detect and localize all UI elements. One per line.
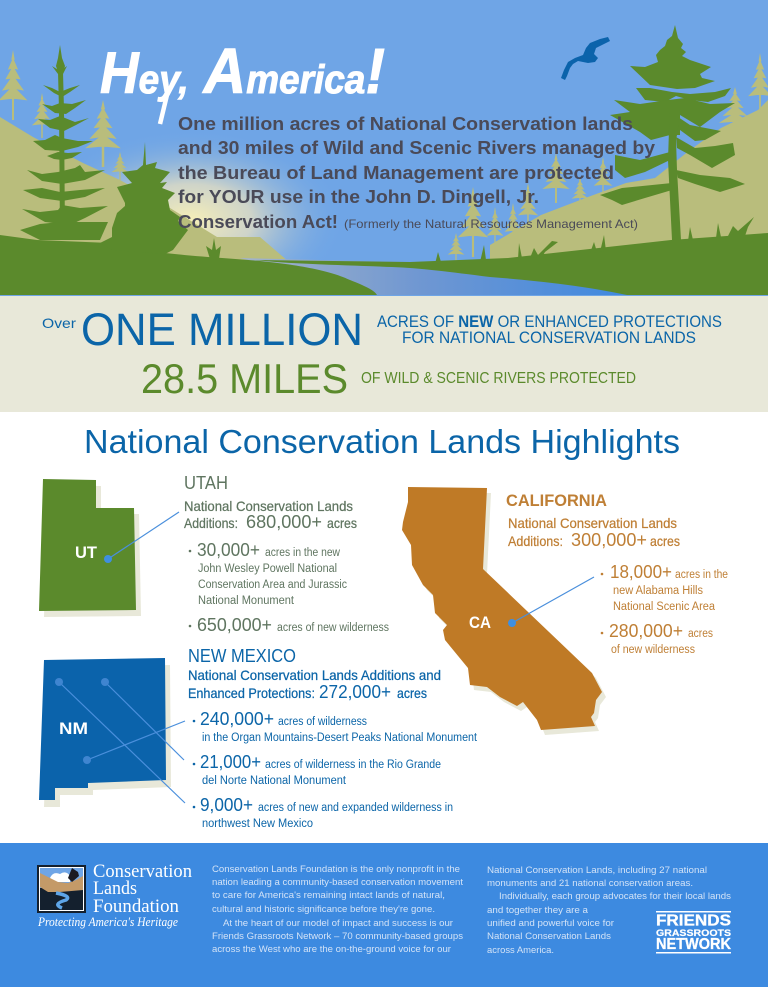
tree: small: [100, 142, 188, 254]
text block: New Mexico: acres of wilderness in the Rio Grande: [265, 759, 441, 771]
text block: foundation description: across the West who are the on-the-ground voice for our: [212, 944, 451, 955]
text block: network description: and together they are a: [487, 905, 589, 916]
text block: network description: across America.: [487, 945, 554, 956]
stat: one million acres: ONE MILLION: [81, 304, 363, 355]
text block: New Mexico: 240,000+: [200, 708, 274, 729]
text block: Utah: 680,000+: [246, 512, 322, 532]
text block: New Mexico: Enhanced Protections:: [188, 685, 315, 701]
text block: New Mexico: NEW MEXICO: [188, 646, 296, 666]
text block: New Mexico: acres: [397, 685, 427, 701]
text: foundation name: Protecting America's Heritage: [37, 914, 178, 929]
text block: foundation description: [212, 864, 463, 955]
text block: California: 18,000+: [610, 561, 672, 582]
distant pale trees: [0, 50, 768, 263]
text block: Utah: John Wesley Powell National: [198, 563, 337, 575]
map: Utah: UT: [75, 543, 98, 562]
text block: Utah: 650,000+: [197, 614, 272, 635]
text block: hero intro: for YOUR use in the John D. Dingell, Jr.: [178, 187, 539, 207]
text: foundation name: Conservation: [93, 861, 192, 882]
text block: hero intro: One million acres of National Conservation lands: [178, 114, 633, 134]
icon: Conservation Lands Foundation logo: [37, 865, 86, 913]
text block: Utah: Additions:: [184, 515, 238, 531]
text block: New Mexico: del Norte National Monument: [202, 775, 347, 787]
text block: hero intro: (Formerly the Natural Resources Management Act): [344, 217, 638, 231]
text block: network description: Individually, each group advocates for their local lands: [499, 891, 731, 902]
text block: California: National Scenic Area: [613, 601, 716, 613]
stat: 28.5 miles: 28.5 MILES: [141, 355, 348, 402]
icon: Friends Grassroots Network logo: NETWORK: [656, 936, 732, 953]
ground: [0, 235, 377, 295]
text block: California: CALIFORNIA: [506, 491, 607, 510]
stat: one million acres: [42, 304, 722, 355]
map: California: CA: [469, 613, 491, 632]
text block: foundation description: cultural and historic significance before they're gone.: [212, 904, 435, 915]
text block: New Mexico: acres of wilderness: [278, 716, 367, 728]
stat: 28.5 miles: OF WILD & SCENIC RIVERS PROTECTED: [361, 370, 636, 387]
text block: Utah: acres in the new: [265, 547, 341, 559]
text block: California: 300,000+: [571, 530, 647, 550]
map: New Mexico: [39, 658, 185, 807]
text block: California: [506, 491, 728, 656]
text block: foundation description: Friends Grassroots Network – 70 community-based groups: [212, 931, 463, 942]
text block: hero intro: Conservation Act!: [178, 212, 338, 232]
text block: California: acres: [650, 533, 680, 549]
text block: New Mexico: 272,000+: [319, 682, 391, 702]
text block: Utah: 30,000+: [197, 539, 260, 560]
panel: hero landscape: [0, 0, 768, 310]
heading: highlights: National Conservation Lands Highlights: [84, 423, 680, 460]
text block: New Mexico: 9,000+: [200, 794, 253, 815]
icon: Friends Grassroots Network logo: [656, 911, 732, 954]
text block: New Mexico: northwest New Mexico: [202, 818, 313, 830]
text block: foundation description: At the heart of our model of impact and success is our: [223, 918, 453, 929]
text block: hero intro: [178, 114, 655, 232]
text block: hero intro: and 30 miles of Wild and Scenic Rivers managed by: [178, 138, 655, 158]
text block: network description: monuments and 21 national conservation areas.: [487, 878, 693, 889]
icon: Friends Grassroots Network logo: GRASSROOTS: [656, 928, 731, 939]
river: [240, 258, 640, 295]
text block: New Mexico: in the Organ Mountains-Desert Peaks National Monument: [202, 732, 478, 744]
text block: network description: [487, 865, 731, 956]
stat: 28.5 miles: [141, 355, 636, 402]
text block: California: new Alabama Hills: [613, 585, 703, 597]
text block: New Mexico: National Conservation Lands Additions and: [188, 667, 441, 683]
sand hills: [0, 117, 289, 262]
text: foundation name: Foundation: [93, 896, 179, 917]
text block: California: Additions:: [508, 533, 563, 549]
text block: California: acres: [688, 628, 713, 640]
text block: network description: National Conservation Lands, including 27 national: [487, 865, 707, 876]
panel: key statistics band: [0, 296, 768, 412]
grass tufts: [206, 217, 754, 264]
text block: Utah: [184, 473, 389, 635]
text block: foundation description: nation leading a community-based conservation movement: [212, 877, 463, 888]
text block: Utah: acres of new wilderness: [277, 622, 389, 634]
text block: foundation description: to care for America's remaining intact lands of natural,: [212, 890, 445, 901]
text block: network description: unified and powerful voice for: [487, 918, 614, 929]
text block: California: acres in the: [675, 569, 728, 581]
text block: California: National Conservation Lands: [508, 515, 677, 531]
text block: Utah: National Conservation Lands: [184, 498, 353, 514]
text block: New Mexico: [188, 646, 478, 830]
panel: footer: [0, 843, 768, 987]
text block: California: 280,000+: [609, 620, 683, 641]
stat: one million acres: FOR NATIONAL CONSERVATION LANDS: [402, 329, 696, 347]
text block: Utah: Conservation Area and Jurassic: [198, 579, 347, 591]
text block: Utah: National Monument: [198, 595, 295, 607]
text block: Utah: UTAH: [184, 473, 228, 493]
text block: New Mexico: acres of new and expanded wilderness in: [258, 802, 453, 814]
text block: network description: National Conservation Lands: [487, 931, 611, 942]
stat: one million acres: Over: [42, 315, 76, 331]
title: Hey, America!: Hey, America!: [100, 35, 385, 107]
map: New Mexico: NM: [59, 719, 88, 738]
text block: foundation description: Conservation Lands Foundation is the only nonprofit in the: [212, 864, 460, 875]
tree: left: [20, 45, 108, 240]
icon: Friends Grassroots Network logo: FRIENDS: [656, 912, 731, 930]
text block: California: of new wilderness: [611, 644, 695, 656]
map: Utah: [39, 479, 179, 617]
text block: hero intro: the Bureau of Land Management are protected: [178, 163, 614, 183]
icon: bird: [561, 37, 610, 80]
stat: one million acres: ACRES OF NEW OR ENHANCED PROTECTIONS: [377, 313, 722, 331]
map: California: [402, 487, 606, 735]
text: foundation name: [37, 861, 192, 929]
text: foundation name: Lands: [93, 878, 137, 899]
text block: New Mexico: 21,000+: [200, 751, 261, 772]
text block: Utah: acres: [327, 515, 357, 531]
tree: right: [600, 25, 745, 240]
